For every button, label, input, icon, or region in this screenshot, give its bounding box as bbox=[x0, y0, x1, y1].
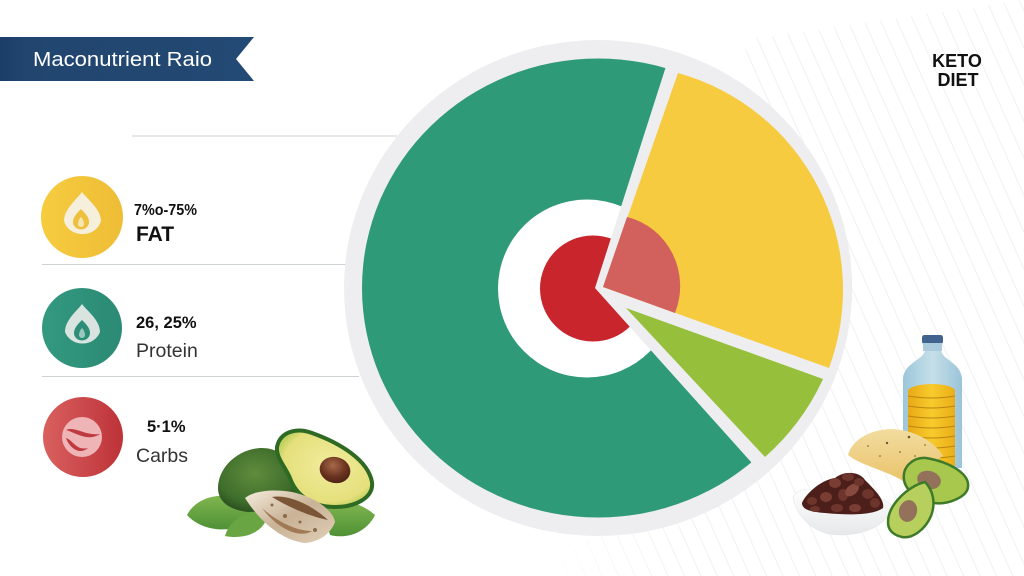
legend item: protein: Protein bbox=[136, 340, 198, 362]
pie chart bbox=[344, 40, 900, 536]
center red circle bbox=[540, 236, 646, 342]
food: oil bottle, tortilla, beans, avocado bbox=[793, 335, 968, 537]
icon: protein droplet bbox=[42, 288, 122, 368]
legend item: carbs bbox=[43, 397, 188, 477]
oil bottle bbox=[903, 335, 962, 468]
legend item: protein: 26, 25% bbox=[136, 314, 197, 332]
segment: pink inner bbox=[603, 217, 680, 313]
icon: carbs leaf bbox=[43, 397, 123, 477]
keto diet label: KETO bbox=[932, 51, 982, 71]
gap wedge bbox=[595, 68, 820, 462]
food: avocado and nut bbox=[187, 431, 375, 543]
cut avocado half bbox=[277, 431, 372, 507]
legend item: fat: 7%o-75% bbox=[134, 202, 197, 219]
segment: green fat share bbox=[362, 58, 834, 518]
leaves bbox=[187, 496, 375, 537]
tortilla bbox=[848, 429, 943, 481]
chart outer ring bbox=[344, 40, 852, 536]
legend item: carbs: 5·1% bbox=[147, 418, 186, 436]
legend item: fat bbox=[41, 176, 197, 258]
center white ring bbox=[498, 200, 676, 378]
bowl of beans bbox=[793, 473, 892, 535]
icon: fat droplet bbox=[41, 176, 123, 258]
divider rule: top bbox=[132, 135, 397, 137]
keto diet label: DIET bbox=[937, 70, 979, 90]
keto diet label bbox=[932, 51, 982, 90]
avocado half front bbox=[888, 482, 933, 537]
title banner: Maconutrient Raio bbox=[33, 49, 212, 71]
segment: light green bbox=[626, 308, 823, 457]
nut bbox=[245, 490, 335, 543]
avocado half back bbox=[904, 458, 968, 503]
divider rule: protein and carbs bbox=[42, 376, 359, 378]
legend item: protein bbox=[42, 288, 198, 368]
legend item: fat: FAT bbox=[136, 223, 174, 246]
segment: yellow bbox=[603, 73, 843, 368]
whole avocado bbox=[218, 448, 300, 512]
title banner bbox=[0, 37, 254, 81]
legend item: carbs: Carbs bbox=[136, 445, 188, 467]
divider rule: fat and protein bbox=[42, 264, 346, 266]
